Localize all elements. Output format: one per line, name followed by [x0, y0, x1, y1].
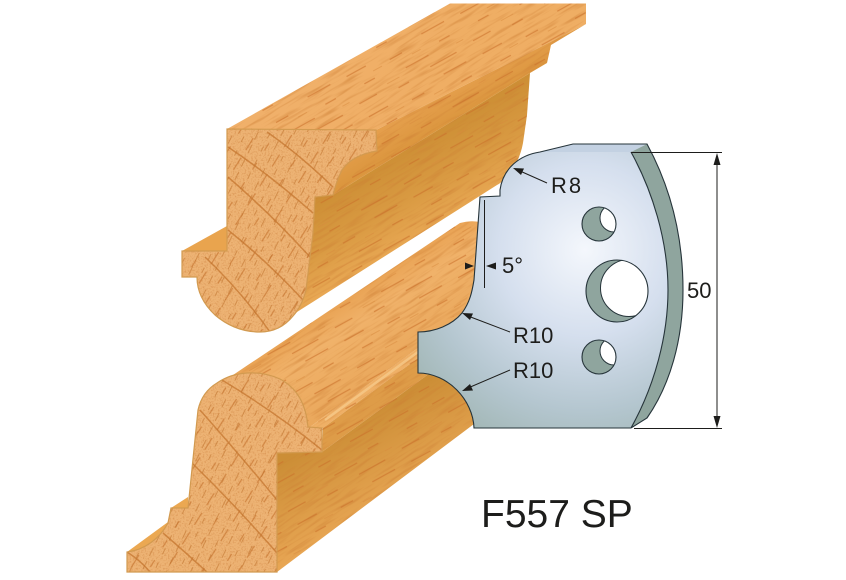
dimension: 5 degree angle: 5° — [502, 253, 523, 278]
dimension: R8: R8 — [551, 173, 583, 198]
dimension: lower R10 — [462, 358, 553, 391]
lower moulding: wood grain — [244, 222, 476, 572]
lower moulding: step highlight — [310, 348, 418, 428]
lower moulding: rounded face — [233, 221, 480, 427]
lower moulding: end grain section — [125, 370, 325, 572]
knife: upper hole — [581, 206, 617, 242]
lower moulding: lower side — [277, 366, 480, 572]
lower moulding: step face — [322, 358, 430, 452]
lower moulding: base sliver — [127, 497, 188, 552]
upper moulding: end grain section — [180, 125, 380, 335]
cutter knife — [418, 144, 683, 428]
dimension: height 50 — [631, 152, 722, 428]
upper moulding: small step — [182, 226, 227, 251]
upper moulding: top face — [227, 4, 586, 130]
knife: top bevel — [540, 144, 647, 152]
knife: lower hole — [581, 340, 617, 374]
dimension: R8 — [513, 168, 583, 198]
upper moulding: wood grain — [232, 4, 586, 302]
knife: body — [418, 152, 668, 428]
knife: green bevel — [631, 144, 683, 428]
product code: F557 SP — [481, 493, 633, 536]
dimension: lower R10: R10 — [513, 358, 553, 383]
dimension: height 50: 50 — [687, 278, 711, 303]
illustration: wood mouldings and cutter knife — [126, 4, 722, 573]
upper moulding: side band — [333, 24, 586, 195]
lower wood moulding — [126, 221, 478, 573]
lower moulding: step bright line — [325, 352, 418, 420]
upper wood moulding — [181, 4, 586, 333]
knife: outline — [418, 144, 683, 428]
knife: centre hole — [586, 260, 658, 322]
dimension: 5 degree angle — [465, 200, 523, 288]
upper moulding: cove and lower side — [293, 73, 530, 316]
dimension: upper R10 — [462, 313, 553, 348]
dimension: upper R10: R10 — [513, 323, 553, 348]
